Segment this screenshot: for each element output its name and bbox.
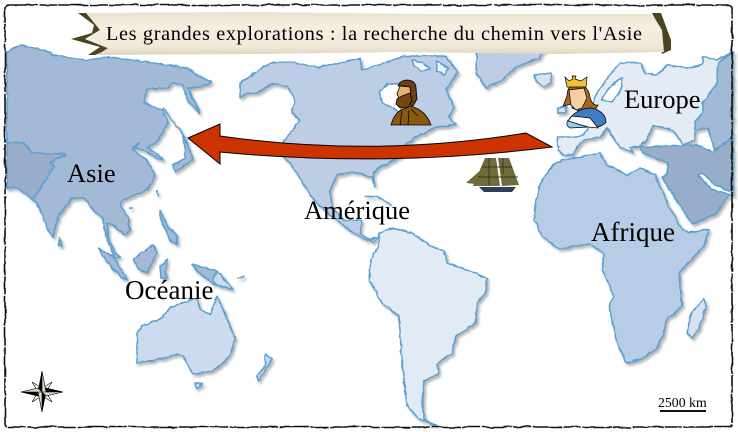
ship hull: [479, 187, 516, 192]
arrow: route from Europe to Asia: [188, 124, 552, 164]
continent: Asia main: [7, 45, 212, 258]
island: Greenland: [476, 50, 545, 88]
banner torn left end: [71, 13, 110, 55]
king light blue hem: [567, 120, 588, 128]
compass dark points: [21, 371, 63, 412]
label: Afrique: Afrique: [591, 217, 675, 247]
island: Madagascar: [687, 299, 706, 338]
continent: Africa: [534, 153, 709, 363]
ship jib: [466, 167, 484, 185]
ship rigging: [478, 158, 518, 186]
continent: Asia east edge: [695, 52, 733, 150]
label: Océanie: Océanie: [125, 275, 213, 305]
explorer coat opening: [400, 109, 418, 125]
king face: [569, 88, 587, 110]
island: Hainan: [129, 207, 133, 209]
island: Sumatra: [98, 248, 127, 279]
label: Amérique: Amérique: [304, 195, 410, 225]
continent: Middle East: [640, 138, 733, 224]
island: Sakhalin: [163, 107, 182, 133]
island: eastern New Guinea: [213, 271, 233, 289]
label: Europe: Europe: [624, 84, 701, 114]
ship sails fore: [473, 158, 500, 186]
continent: North America: [240, 56, 458, 242]
sea: arctic channel east: [436, 61, 448, 75]
banner paper: [86, 12, 664, 55]
explorer coat: [391, 106, 431, 125]
island: Solomon: [237, 276, 245, 279]
island: Cuba: [365, 196, 392, 205]
king hair: [563, 85, 598, 112]
island: Sri Lanka: [59, 237, 62, 246]
scale text: 2500 km: [658, 395, 707, 410]
explorer beard: [396, 93, 412, 108]
label: Asie: Asie: [67, 158, 116, 188]
king crown: [565, 76, 587, 87]
island: Taiwan: [157, 190, 158, 197]
sea: Hudson Bay: [379, 83, 412, 112]
island: Hispaniola: [382, 229, 402, 232]
island: Japan: [173, 133, 193, 172]
icon: king: [563, 76, 606, 128]
island: New Guinea: [192, 264, 233, 289]
continent: Australia: [137, 296, 235, 374]
icon: explorer: [391, 80, 431, 125]
island: Borneo: [133, 245, 157, 273]
compass light points: [21, 371, 63, 412]
island: Sulawesi: [160, 259, 168, 278]
sea: Baltic: [602, 78, 622, 102]
continent: Middle East west part: [7, 142, 67, 200]
scale bar: [658, 395, 707, 412]
title: Les grandes explorations : la recherche du chemin vers l'Asie: [106, 23, 642, 45]
king blue robe: [570, 108, 606, 127]
king ermine band: [568, 116, 598, 128]
island: Philippines: [160, 210, 177, 245]
explorer face: [397, 86, 411, 101]
explorer hair and cap: [398, 80, 417, 106]
ship sails aft: [498, 158, 519, 186]
island: Tasmania: [195, 383, 202, 389]
island: Britain: [557, 106, 566, 114]
icon: ship: [466, 158, 519, 192]
icon: compass rose: [21, 371, 63, 412]
compass diagonal points: [32, 382, 52, 402]
island: New Zealand: [257, 354, 272, 381]
continent: South America: [369, 228, 487, 425]
sea: Persian Gulf: [698, 173, 733, 196]
sea: Canadian arctic channels: [412, 60, 430, 71]
island: Iceland: [534, 73, 552, 87]
title banner: [71, 12, 671, 55]
scale line: [660, 410, 706, 412]
continent: Europe: [557, 52, 733, 155]
banner torn right end: [652, 13, 671, 54]
